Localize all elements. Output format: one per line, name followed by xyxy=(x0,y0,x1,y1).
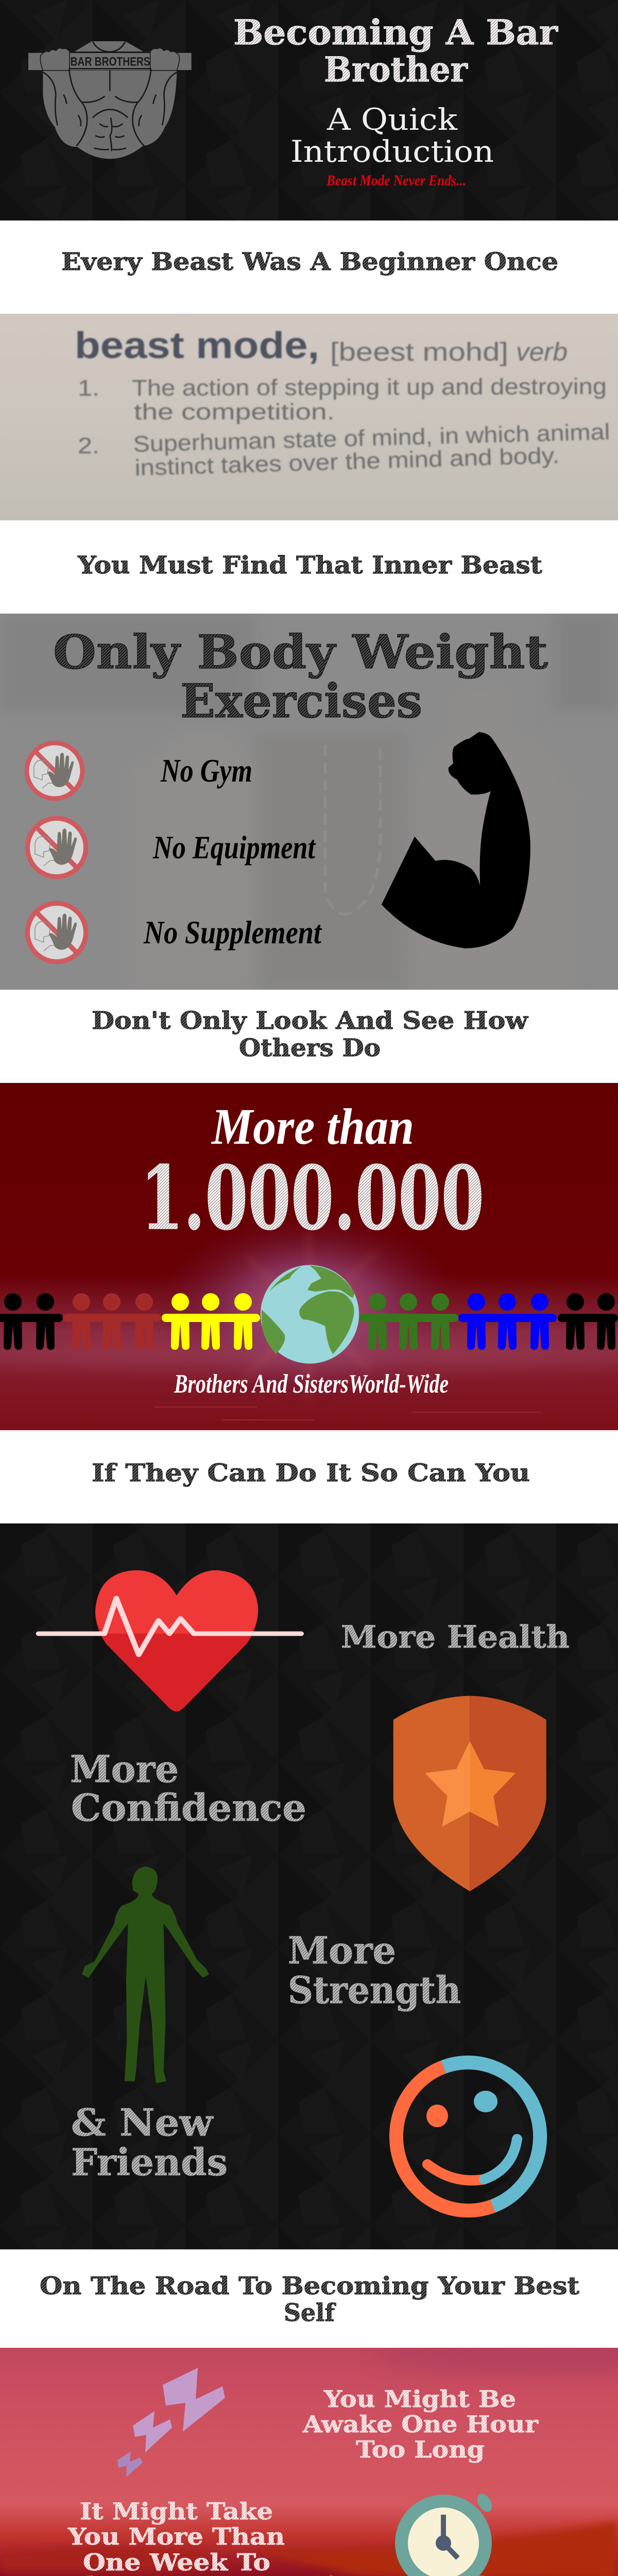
heading: on the road: On The Road To Becoming Your Best xyxy=(40,2272,579,2300)
heading: inner beast: You Must Find That Inner Beast xyxy=(77,551,542,580)
text: more strength: Strength xyxy=(288,1968,461,2012)
text: awake one hour: Awake One Hour xyxy=(302,2411,539,2438)
text: more health: More Health xyxy=(341,1619,570,1655)
panel: beast mode definition: 2. xyxy=(78,433,99,459)
icon: human body xyxy=(82,1867,209,2083)
icon: sleep Zs xyxy=(117,2368,225,2477)
icon: globe xyxy=(261,1265,359,1364)
text: more confidence: Confidence xyxy=(71,1786,306,1829)
icon: no gym sign xyxy=(27,743,82,799)
panel: beast mode definition xyxy=(0,314,618,520)
icon: no supplement sign xyxy=(27,903,86,962)
logo: Bar Brothers: BAR BROTHERS xyxy=(71,55,150,69)
panel: more than one million xyxy=(0,1083,618,1430)
text: more strength: More xyxy=(288,1928,396,1972)
heading: on the road xyxy=(40,2272,579,2327)
text: awake one hour xyxy=(302,2385,539,2463)
heading: every beast: Every Beast Was A Beginner Once xyxy=(61,248,558,276)
heading: if they can: If They Can Do It So Can You xyxy=(92,1459,530,1487)
title: Becoming A Bar xyxy=(233,12,558,53)
text: more than: More than xyxy=(211,1098,414,1155)
panel: header xyxy=(0,0,618,221)
panel: body weight exercises xyxy=(0,614,618,990)
people chain left xyxy=(0,1293,260,1350)
heading: on the road: Self xyxy=(284,2299,336,2327)
text: more confidence: More xyxy=(70,1747,179,1791)
heading: only body weight: Only Body Weight xyxy=(53,625,548,680)
text: more strength xyxy=(288,1928,461,2012)
title xyxy=(233,12,558,90)
subtitle: Introduction xyxy=(290,134,494,169)
title: Brother xyxy=(324,49,468,90)
panel: road obstacles xyxy=(0,2334,618,2576)
heading: look and see xyxy=(92,1007,529,1062)
text: no supplement: No Supplement xyxy=(143,914,322,951)
panel: beast mode definition: instinct takes over the mind and body. xyxy=(134,443,560,481)
panel: beast mode definition: [beest mohd] xyxy=(330,337,508,366)
icon: no equipment sign xyxy=(27,818,86,877)
icon: shield with star xyxy=(393,1696,546,1891)
text: new friends: Friends xyxy=(71,2140,228,2184)
panel: benefits xyxy=(0,1523,618,2249)
panel: beast mode definition: the competition. xyxy=(134,399,335,425)
text: no equipment: No Equipment xyxy=(152,829,316,866)
text: new friends: & New xyxy=(71,2100,214,2144)
panel: beast mode definition: The action of stepping it up and destroying xyxy=(132,374,607,401)
subtitle: A Quick xyxy=(327,102,458,137)
panel: beast mode definition: beast mode, xyxy=(75,325,319,366)
text: more confidence xyxy=(70,1747,306,1829)
panel: beast mode definition: verb xyxy=(516,337,568,366)
panel: beast mode definition: Superhuman state of mind, in which animal xyxy=(133,419,610,457)
panel: beast mode definition: 1. xyxy=(78,376,99,401)
icon: clock xyxy=(395,2492,495,2576)
heading: only body weight xyxy=(55,633,548,718)
caption: Brothers And SistersWorld-Wide xyxy=(174,1369,449,1399)
people chain right xyxy=(359,1293,618,1350)
text: awake one hour: You Might Be xyxy=(323,2385,516,2413)
tagline: Beast Mode Never Ends... xyxy=(326,172,466,189)
text: new friends xyxy=(71,2100,228,2184)
heading: only body weight: Exercises xyxy=(180,674,422,728)
text: awake one hour: Too Long xyxy=(356,2436,485,2463)
icon: smiley xyxy=(396,2062,540,2211)
text: more than one week: You More Than xyxy=(67,2523,285,2550)
text: no gym: No Gym xyxy=(160,752,252,789)
stat: 1.000.000: 1.000.000 xyxy=(141,1147,484,1250)
subtitle xyxy=(290,102,494,169)
icon: flexed arm xyxy=(382,732,530,948)
text: more than one week: One Week To xyxy=(83,2549,270,2576)
logo: Bar Brothers xyxy=(28,41,192,159)
icon: heart with pulse xyxy=(39,1570,301,1711)
heading: look and see: Don't Only Look And See How xyxy=(92,1007,529,1035)
text: more than one week: It Might Take xyxy=(80,2498,273,2525)
heading: look and see: Others Do xyxy=(239,1034,381,1062)
text: more than one week xyxy=(67,2502,284,2571)
